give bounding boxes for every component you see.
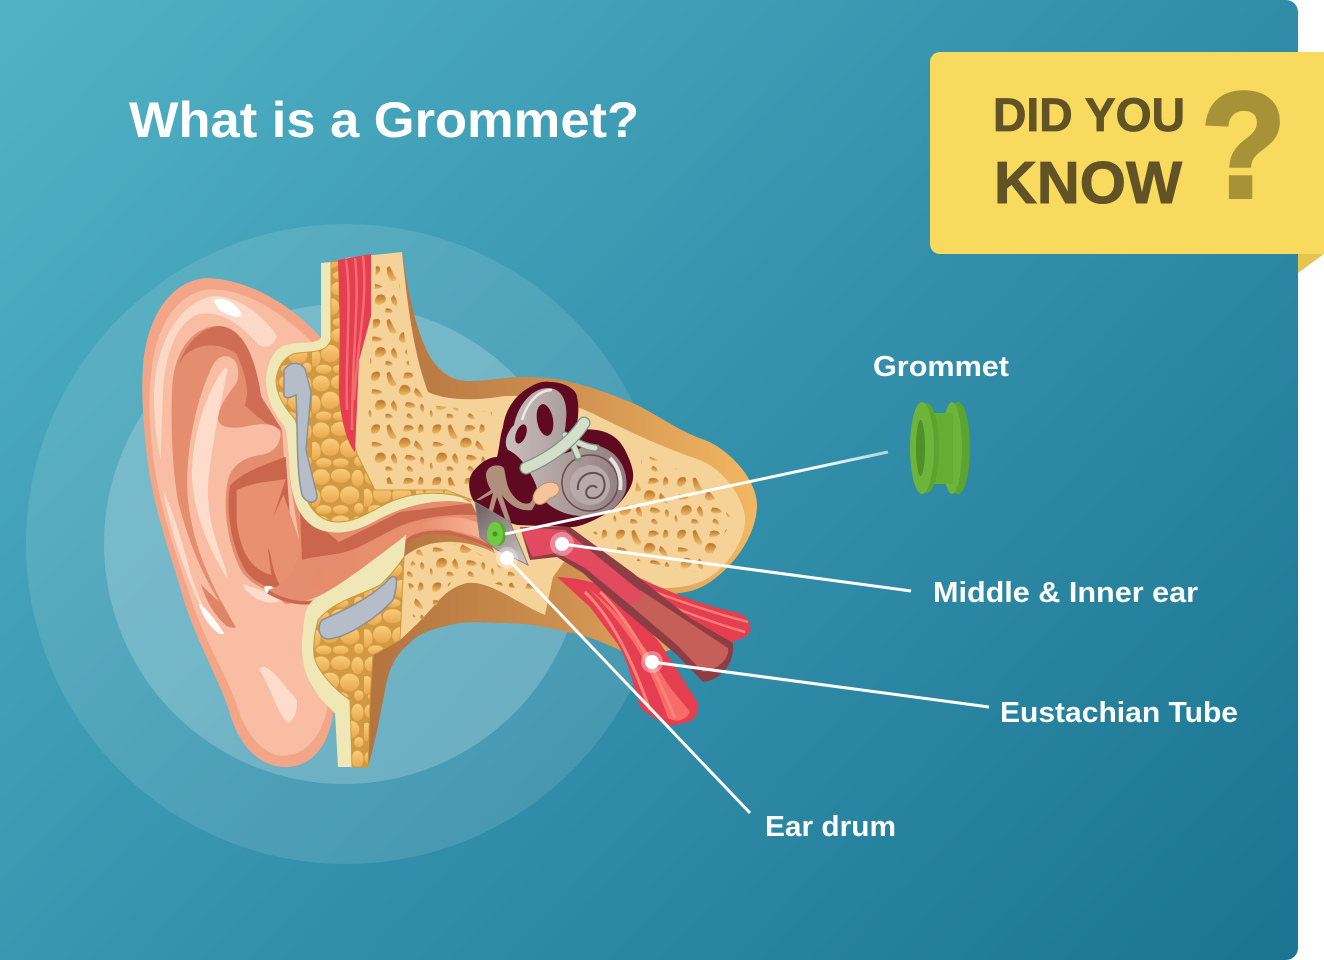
- outer halo circle: [26, 224, 666, 864]
- lower canal wall: [302, 535, 406, 767]
- lower tube muscle: [557, 577, 698, 725]
- ear cross-section tissue: [338, 252, 757, 767]
- lower bone pores: [407, 543, 543, 620]
- did you know banner: ?: [1201, 61, 1286, 229]
- grommet illustration: [910, 402, 970, 494]
- upper cartilage: [284, 363, 317, 502]
- upper fatty tissue: [276, 261, 472, 522]
- eustachian tube pointer: [641, 651, 989, 707]
- ossicles: [476, 465, 559, 524]
- upper canal wall: [266, 261, 473, 532]
- did you know banner: [930, 52, 1324, 273]
- ear canal lining: [312, 517, 503, 590]
- inner halo circle: [104, 304, 584, 784]
- temporal bone: [345, 252, 745, 652]
- did you know banner: KNOW: [994, 150, 1182, 216]
- right bone pores: [593, 453, 733, 573]
- ear canal: [268, 480, 510, 603]
- ear drum: [475, 502, 528, 565]
- label: eustachian tube: Eustachian Tube: [1000, 697, 1238, 729]
- upper tube muscle: [617, 566, 750, 642]
- upper bone pores: [362, 262, 492, 486]
- ear canal lower shadow: [268, 532, 500, 603]
- label: middle and inner ear: Middle & Inner ear: [933, 577, 1198, 609]
- label: grommet: Grommet: [873, 351, 1009, 383]
- inner ear: [506, 388, 627, 516]
- vestibular nerve: [526, 423, 597, 468]
- title: What is a Grommet?: [129, 92, 639, 148]
- grommet in ear drum: [487, 522, 506, 546]
- ear drum pointer: [496, 547, 750, 813]
- upper muscle: [338, 254, 371, 452]
- ear canal upper shadow: [300, 503, 490, 560]
- middle and inner ear pointer: [550, 532, 911, 591]
- outer ear: [142, 278, 353, 767]
- label: ear drum: Ear drum: [765, 811, 896, 843]
- middle ear cavity: [469, 382, 633, 527]
- lower cartilage: [319, 577, 396, 639]
- eustachian tube: [520, 527, 733, 682]
- lower fatty tissue: [314, 557, 404, 767]
- did you know banner: DID YOU: [993, 88, 1185, 141]
- grommet pointer line: [505, 452, 888, 534]
